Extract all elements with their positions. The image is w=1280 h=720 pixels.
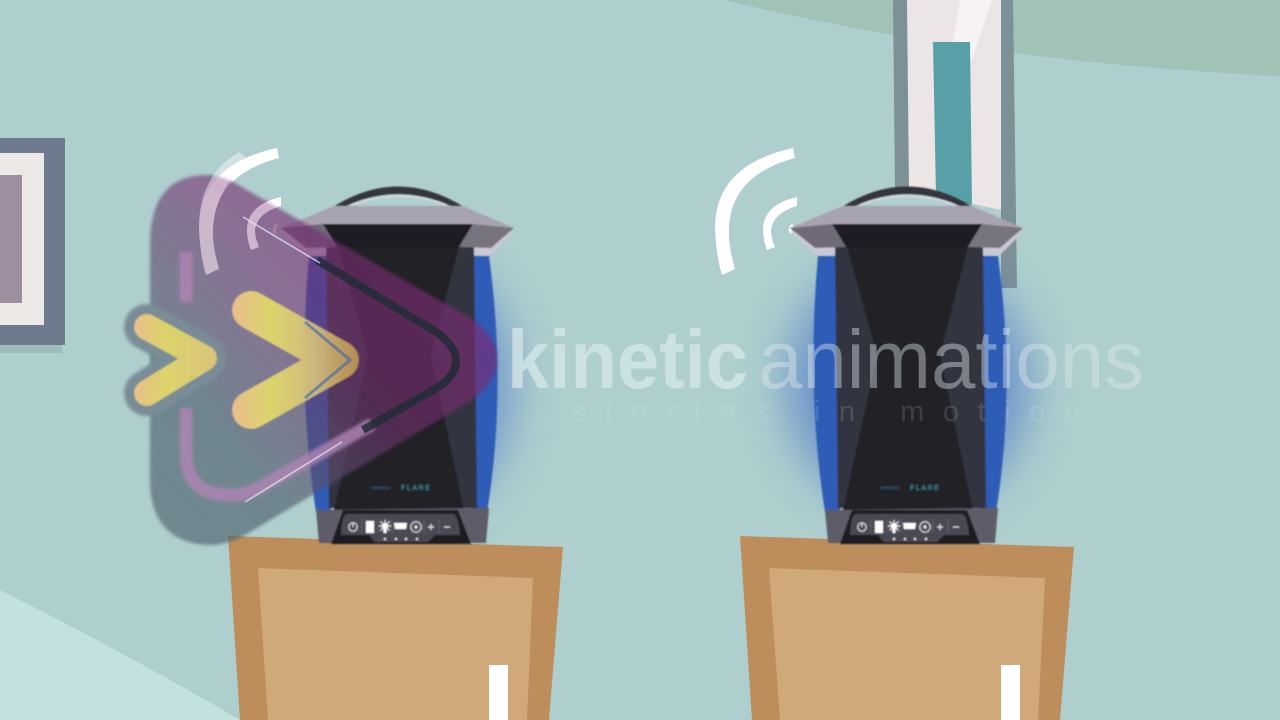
- hourglass front: [843, 247, 973, 510]
- left hourglass front: [334, 247, 464, 510]
- logo watermark: play symbol: [147, 152, 497, 545]
- logo rounded triangle: [150, 175, 497, 545]
- right picture frame: [893, 0, 1017, 288]
- blue glow: right device: [788, 260, 1028, 510]
- table: left: [228, 536, 563, 720]
- brand label: [880, 485, 941, 492]
- left brand label: FLARE: [401, 485, 432, 492]
- left cap lip: [281, 232, 514, 255]
- brand wordmark: kinetic: [507, 313, 748, 406]
- upper right wall band: [725, 0, 1280, 76]
- device: left: [281, 186, 514, 544]
- body: [835, 247, 986, 508]
- brand tagline: stories in motion: [572, 396, 1080, 428]
- left blue side panels: [304, 256, 498, 512]
- left picture frame: [0, 138, 65, 353]
- lower left floor curve: [0, 590, 240, 720]
- left control panel: [341, 514, 460, 542]
- device: right: [790, 186, 1023, 544]
- left brand label: [371, 485, 432, 492]
- blue glow: left device: [330, 260, 510, 510]
- brand wordmark: [507, 313, 1144, 406]
- left brand label: HOMEDICS: [371, 486, 391, 490]
- right chevron: [251, 310, 340, 410]
- brand label: HOMEDICS: [880, 486, 900, 490]
- wifi arcs: left: [199, 148, 281, 275]
- left chevron: [147, 327, 204, 393]
- cap: [790, 206, 1023, 248]
- cap lip: [790, 232, 1023, 255]
- base: [825, 508, 998, 544]
- chevron inner blue accent: [305, 322, 350, 398]
- left cap: [281, 206, 514, 248]
- left body: [326, 247, 477, 508]
- left base: [316, 508, 489, 544]
- brand label: FLARE: [910, 485, 941, 492]
- blue side panels: [813, 256, 1007, 512]
- brand wordmark: animations: [758, 313, 1144, 406]
- logo inner pink outline: [186, 252, 372, 495]
- control panel: [850, 514, 969, 542]
- handle: [842, 186, 973, 207]
- logo wifi arcs highlight: [199, 152, 281, 275]
- wifi arcs: right: [715, 148, 797, 275]
- left handle: [333, 186, 464, 207]
- chevron halo: [147, 327, 203, 393]
- table: right: [740, 536, 1074, 720]
- logo highlight streaks: [243, 217, 342, 502]
- logo inner dark outline: [317, 260, 456, 430]
